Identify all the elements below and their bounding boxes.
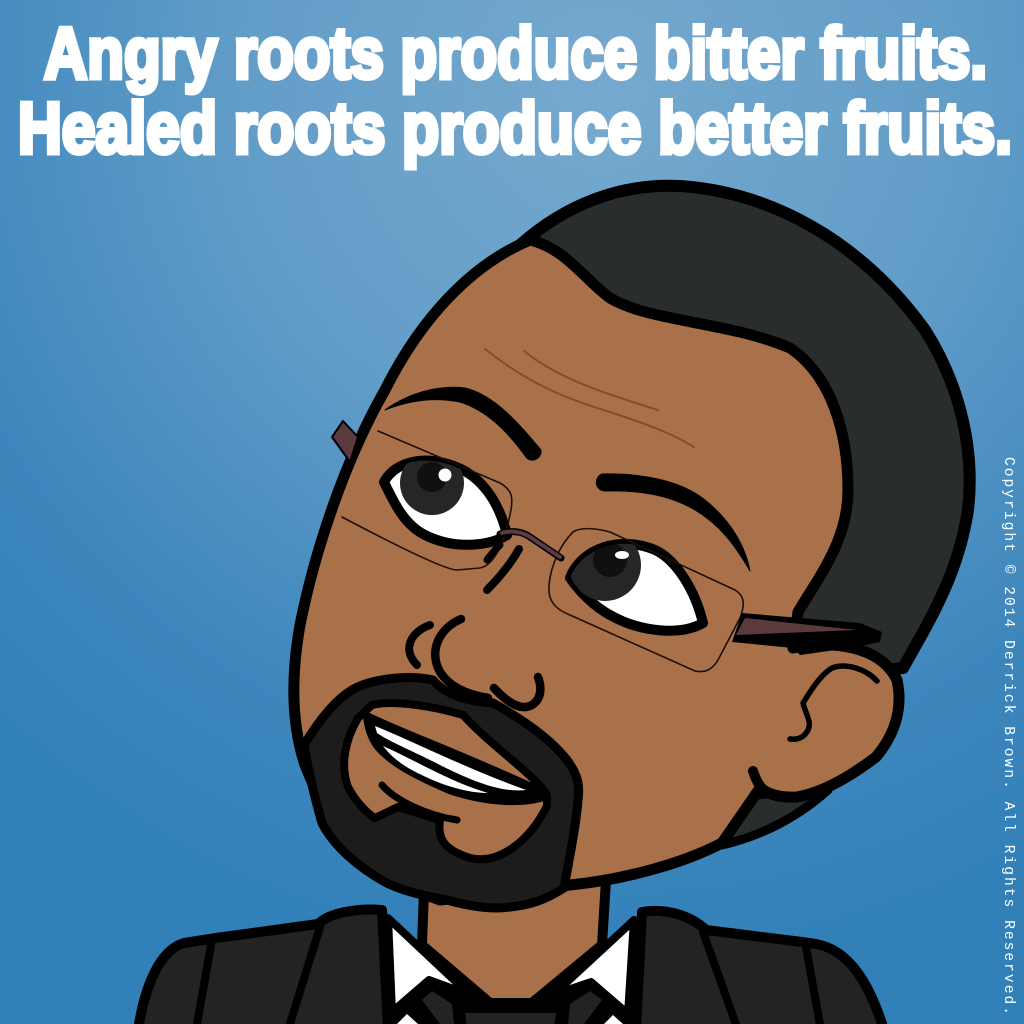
nose pad shadow [487, 545, 500, 560]
mouth and chin skin [344, 703, 547, 859]
shirt lower left [397, 1014, 418, 1024]
left iris [400, 460, 464, 515]
right eyebrow [596, 474, 750, 571]
shirt collar left [388, 918, 470, 1012]
glasses arm right inner [736, 618, 857, 635]
goatee [304, 678, 579, 908]
jacket right [636, 911, 884, 1024]
right eye [570, 544, 703, 631]
upper teeth [375, 726, 526, 790]
lower-back head shadow [722, 790, 828, 845]
nostril crease [409, 625, 430, 665]
copyright notice: Copyright © 2014 Derrick Brown. All Rights Reserved. [1000, 457, 1016, 1015]
character: suit and shirt [138, 880, 884, 1024]
title [18, 14, 1012, 169]
hair [520, 186, 970, 680]
tie knot sides [422, 991, 602, 1024]
forehead wrinkles [485, 349, 694, 447]
face and ear [294, 240, 899, 900]
lip line [382, 785, 457, 820]
mouth opening [364, 712, 548, 804]
glasses arm left [332, 421, 358, 462]
right iris [571, 544, 641, 601]
shirt backing [385, 975, 640, 1024]
tie [462, 1010, 560, 1024]
shirt lower right [604, 1015, 623, 1024]
neck [422, 880, 606, 1003]
jacket seams [196, 924, 821, 1024]
glasses arm right [732, 613, 882, 655]
lower teeth [383, 746, 488, 793]
left eye [384, 461, 507, 545]
shirt collar right [553, 920, 634, 1014]
ear detail [790, 666, 877, 739]
jaw tip line [753, 771, 770, 793]
jacket left [138, 910, 388, 1024]
left eyebrow [385, 387, 541, 460]
character: head [294, 186, 970, 908]
glasses [342, 431, 743, 672]
nose bridge line [487, 549, 519, 590]
glasses bridge [500, 532, 561, 558]
nose [435, 619, 540, 707]
